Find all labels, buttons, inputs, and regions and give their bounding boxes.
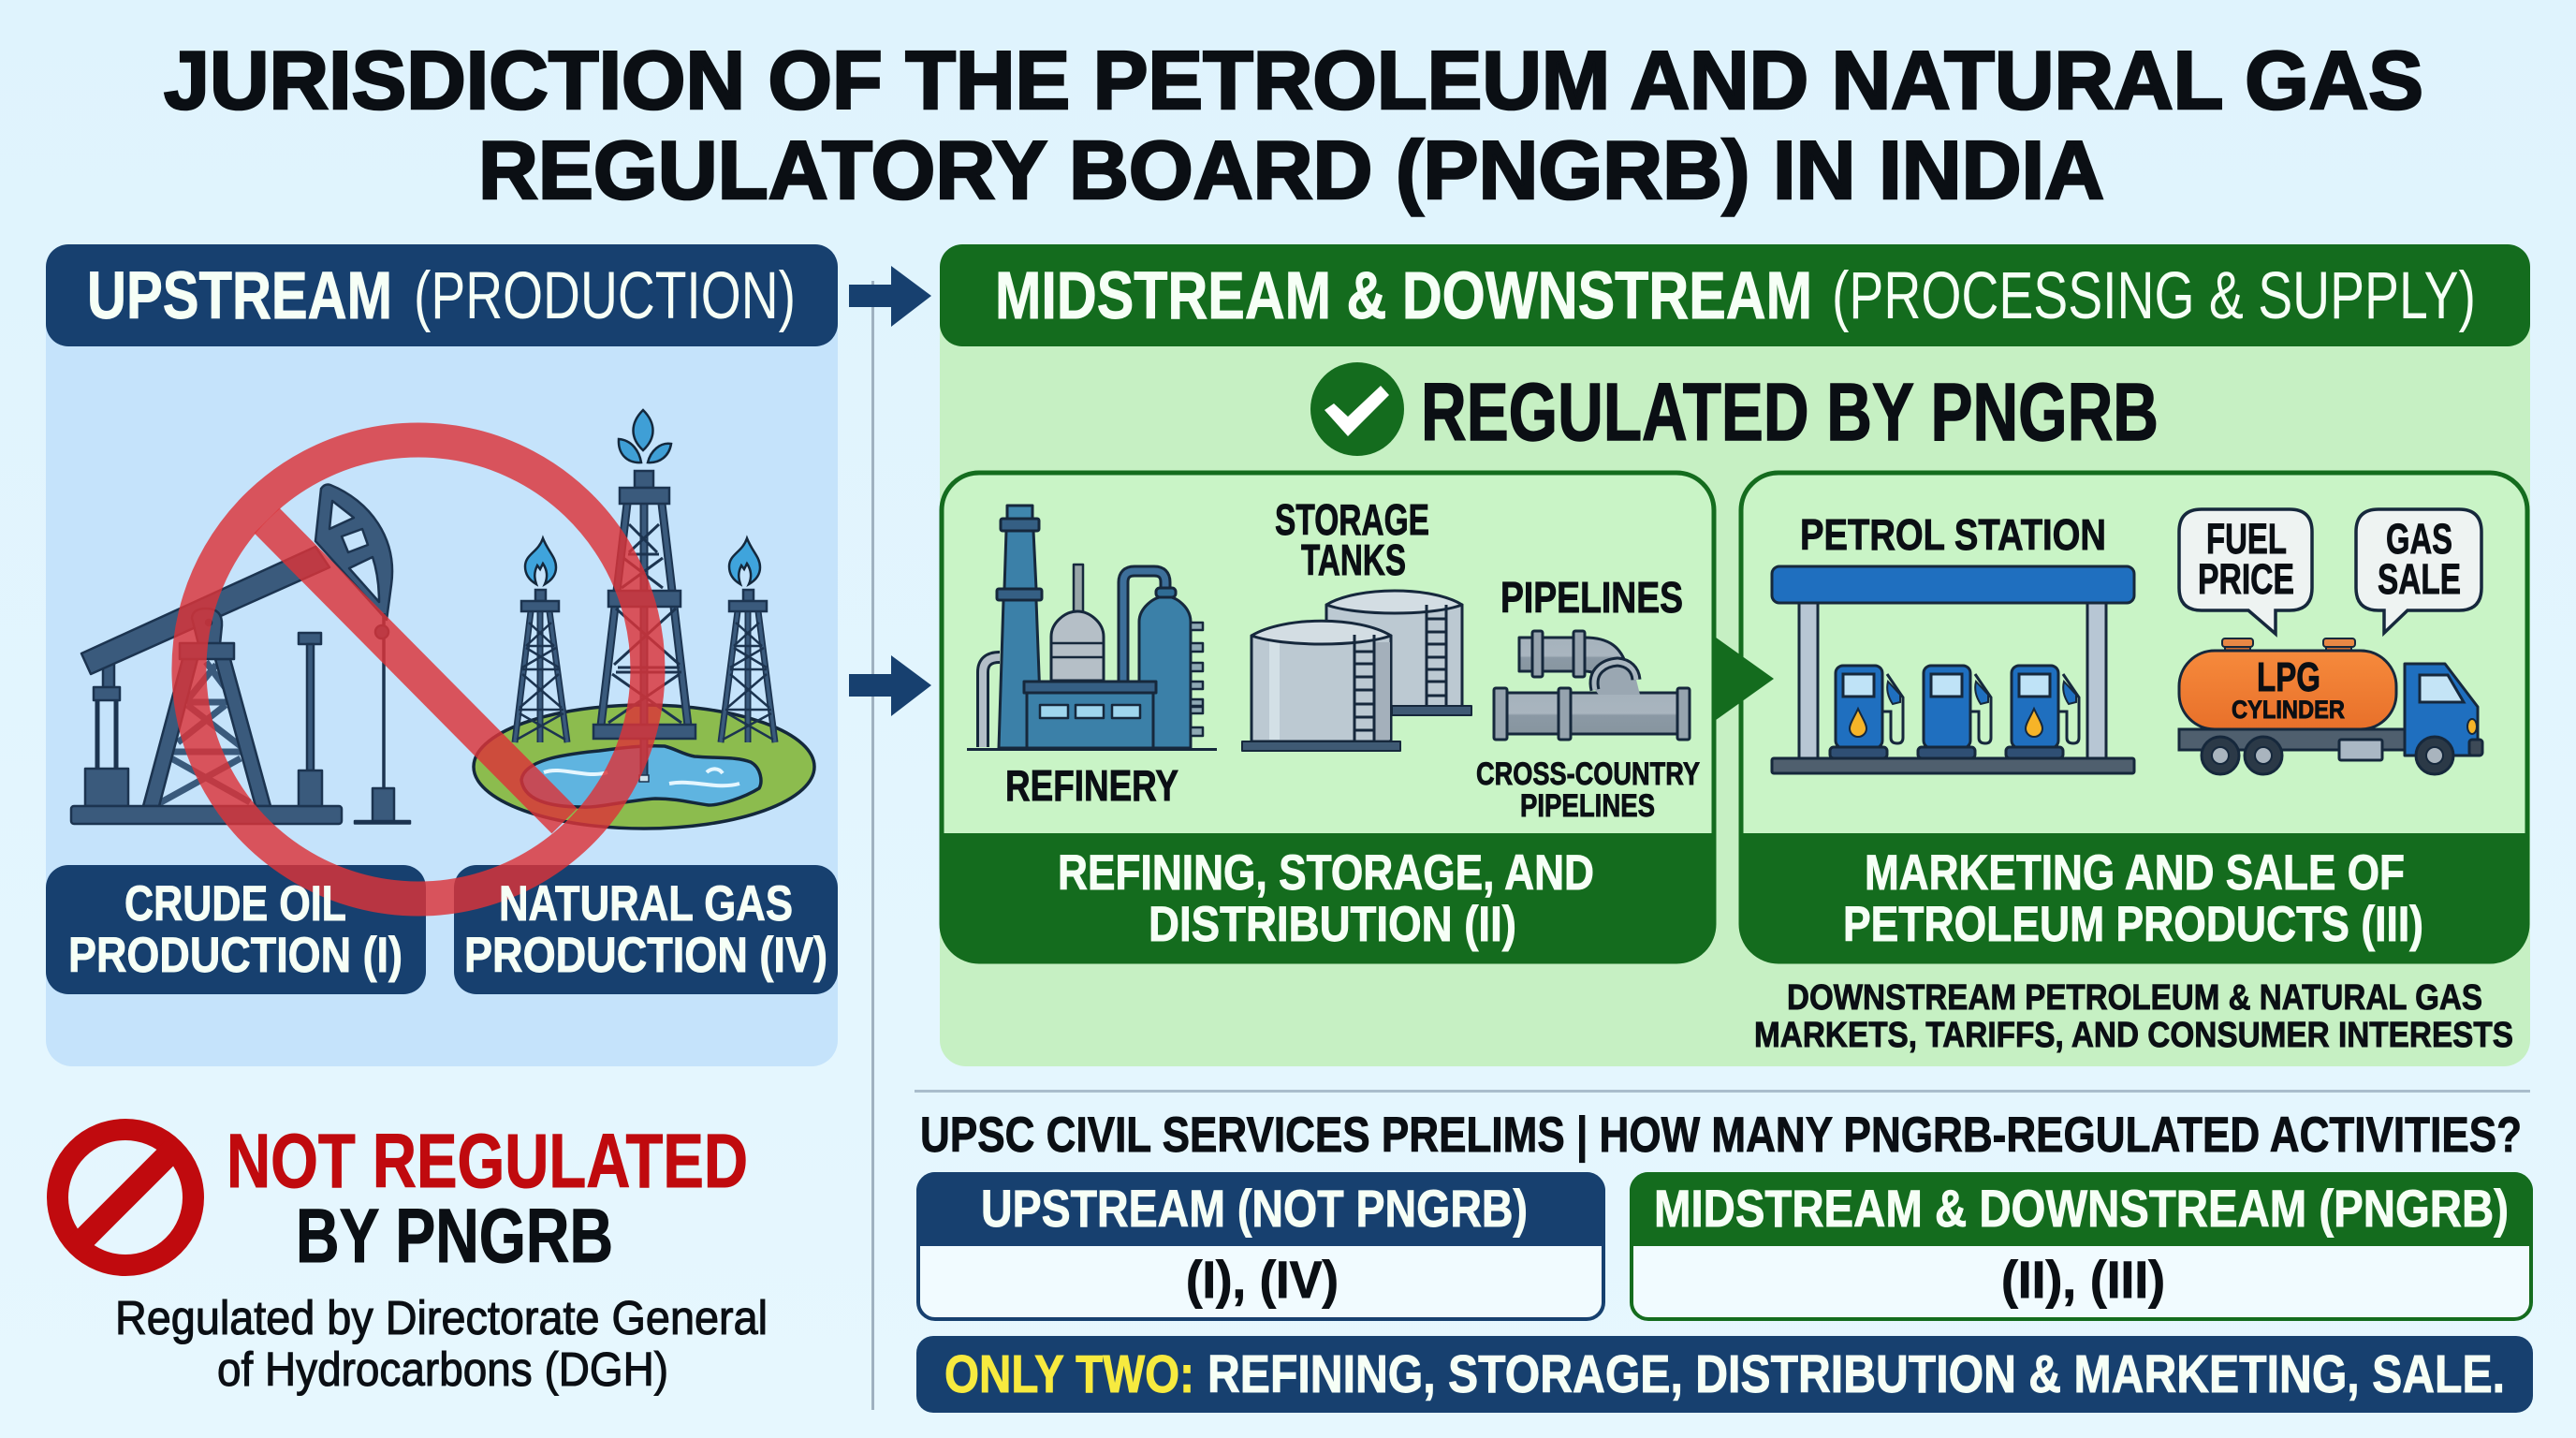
text block: downstream markets note — [1754, 978, 2513, 1055]
heading: upstream header: UPSTREAM — [87, 259, 392, 333]
label: natural gas production: NATURAL GAS — [499, 876, 793, 932]
icon: fuel pump 1 — [1830, 666, 1903, 758]
label: LPG cylinder: LPG — [2257, 654, 2320, 700]
icon: prohibition sign overlay — [189, 440, 648, 899]
text block: regulated by DGH: Regulated by Directorate General — [115, 1291, 768, 1344]
icon: petrol station — [1772, 566, 2134, 773]
callout: gas sale bubble: GAS — [2386, 515, 2452, 563]
callout: only two answer bar — [916, 1336, 2533, 1413]
label: marketing and sale: PETROLEUM PRODUCTS (III) — [1843, 897, 2423, 952]
icon: oil pumpjack — [71, 485, 410, 824]
divider: horizontal line — [915, 1090, 2530, 1093]
heading: regulated by PNGRB: REGULATED BY PNGRB — [1421, 367, 2159, 458]
label: LPG cylinder: CYLINDER — [2232, 696, 2345, 724]
label: storage tanks: STORAGE — [1275, 495, 1429, 544]
icon: check mark — [1310, 362, 1404, 456]
label: cross-country pipelines — [1476, 756, 1700, 824]
text block: not regulated by PNGRB: NOT REGULATED — [227, 1119, 748, 1204]
text block: not regulated by PNGRB — [227, 1119, 748, 1279]
icon: three-leaf gas flame — [619, 410, 671, 462]
label: refining storage distribution — [1058, 845, 1594, 952]
label: natural gas production — [464, 876, 827, 983]
callout: gas sale bubble: SALE — [2378, 555, 2461, 603]
label: natural gas production: PRODUCTION (IV) — [464, 928, 827, 983]
arrow: upper — [849, 266, 931, 327]
heading: midstream and downstream header — [940, 244, 2530, 346]
icon: LPG tanker truck — [2179, 638, 2482, 774]
label: crude oil production: CRUDE OIL — [124, 876, 346, 932]
label: refinery: REFINERY — [1005, 761, 1178, 810]
icon: not regulated prohibition — [58, 1129, 193, 1266]
label: marketing and sale: MARKETING AND SALE OF — [1865, 845, 2405, 901]
divider: vertical line — [871, 281, 874, 1410]
label: cross-country pipelines: CROSS-COUNTRY — [1476, 756, 1700, 792]
panel: upstream background — [46, 244, 838, 1066]
label: LPG cylinder — [2232, 654, 2345, 724]
table: midstream and downstream answer: (II), (III) — [2001, 1250, 2165, 1309]
table: upstream answer: UPSTREAM (NOT PNGRB) — [981, 1179, 1528, 1238]
icon: fuel pump 3 — [2006, 666, 2079, 758]
callout: fuel price bubble: PRICE — [2198, 555, 2294, 603]
text block: regulated by DGH — [115, 1291, 768, 1396]
text block: downstream markets note: DOWNSTREAM PETROLEUM & NATURAL GAS — [1787, 978, 2482, 1018]
label: crude oil production: PRODUCTION (I) — [68, 928, 402, 983]
label: refining storage distribution: DISTRIBUTION (II) — [1149, 897, 1516, 952]
table: upstream answer — [916, 1172, 1605, 1319]
pill: natural gas background — [454, 865, 838, 994]
callout: fuel price bubble: FUEL — [2206, 515, 2287, 563]
label: refining storage distribution: REFINING, STORAGE, AND — [1058, 845, 1594, 901]
panel: refining, storage and distribution card — [940, 473, 1716, 962]
icon: natural gas field — [474, 410, 814, 829]
heading: upstream header: (PRODUCTION) — [414, 259, 796, 333]
arrow: lower — [849, 655, 931, 716]
icon: right derrick — [721, 538, 775, 742]
icon: refinery — [967, 506, 1217, 751]
arrow: refining to marketing — [1712, 635, 1774, 723]
panel: midstream and downstream background — [940, 244, 2530, 1066]
label: petrol station: PETROL STATION — [1800, 510, 2106, 559]
heading: midstream and downstream header: MIDSTREAM & DOWNSTREAM — [995, 259, 1812, 333]
icon: storage tanks — [1242, 591, 1471, 751]
icon: pipelines — [1494, 631, 1690, 740]
callout: gas sale bubble — [2356, 509, 2481, 633]
panel: marketing and sale card — [1739, 473, 2529, 962]
label: storage tanks — [1275, 495, 1429, 584]
table: upstream answer: (I), (IV) — [1186, 1250, 1339, 1309]
icon: fuel pump 2 — [1918, 666, 1991, 758]
title — [164, 34, 2423, 216]
icon: center derrick — [593, 471, 695, 782]
label: cross-country pipelines: PIPELINES — [1520, 788, 1655, 824]
title: REGULATORY BOARD (PNGRB) IN INDIA — [478, 124, 2104, 216]
text block: regulated by DGH: of Hydrocarbons (DGH) — [217, 1343, 668, 1396]
label: pipelines: PIPELINES — [1500, 573, 1683, 622]
label: storage tanks: TANKS — [1301, 536, 1406, 584]
table: midstream and downstream answer — [1630, 1172, 2533, 1319]
label: crude oil production — [68, 876, 402, 983]
icon: left derrick — [515, 538, 567, 742]
text block: not regulated by PNGRB: BY PNGRB — [296, 1194, 613, 1279]
callout: fuel price bubble — [2179, 509, 2312, 634]
callout: only two answer bar: ONLY TWO: — [944, 1344, 1194, 1404]
label: marketing and sale — [1843, 845, 2423, 952]
title: JURISDICTION OF THE PETROLEUM AND NATURAL GAS — [164, 34, 2423, 126]
pill: crude oil background — [46, 865, 426, 994]
heading: upstream header — [46, 244, 838, 346]
